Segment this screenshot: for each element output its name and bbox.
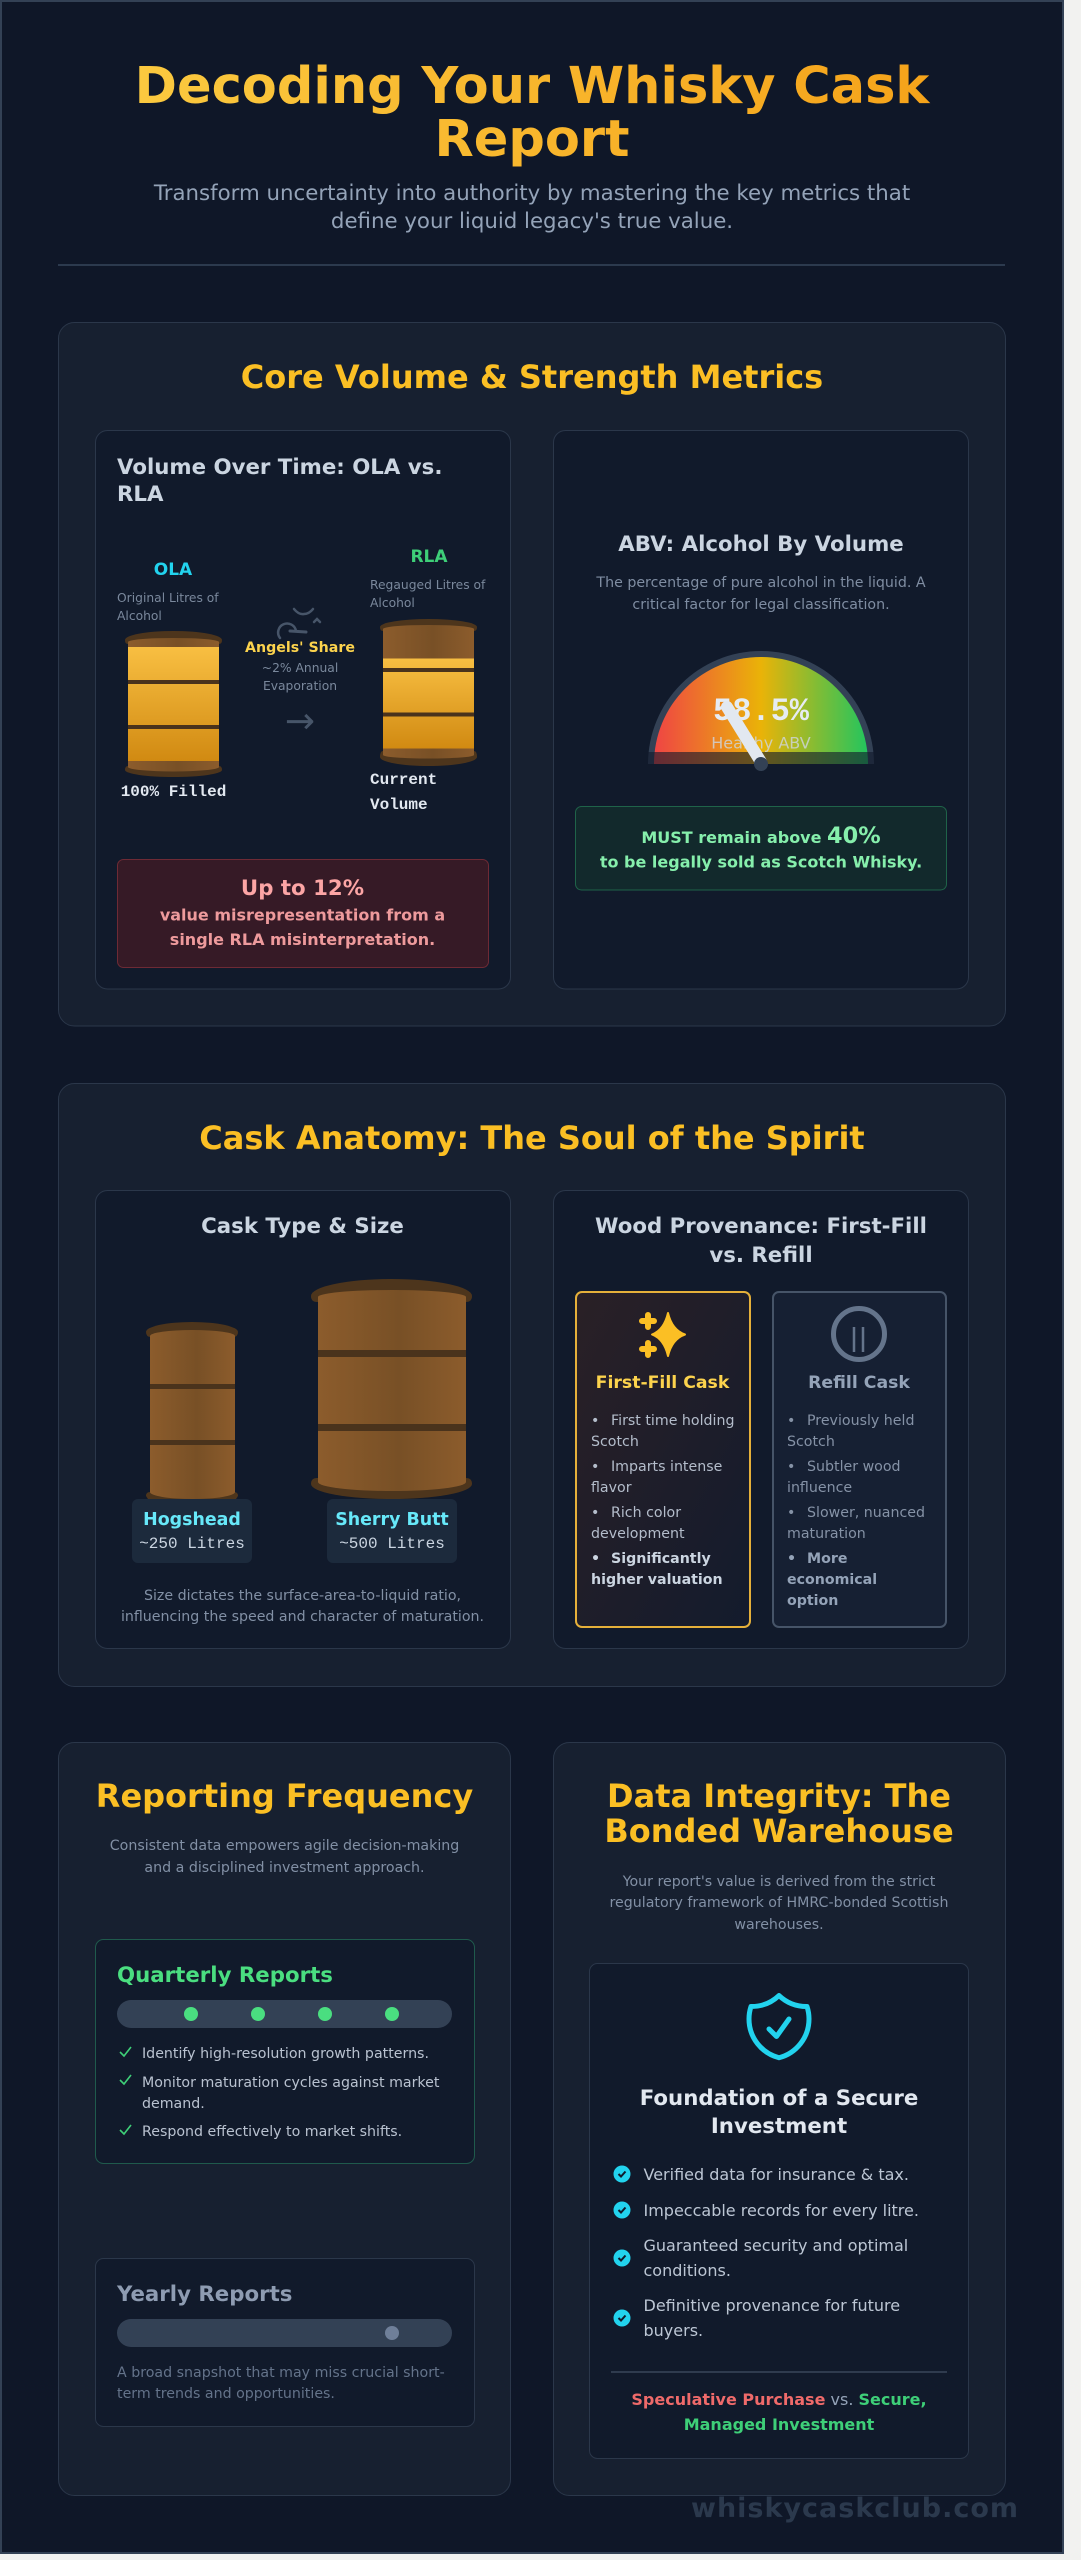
RLA column — [370, 547, 486, 814]
heading: wood provenance: vs. Refill — [709, 1243, 813, 1268]
refill list: maturation — [787, 1526, 866, 1542]
icon: shield check — [746, 1993, 812, 2060]
first-fill list: Imparts intense — [611, 1459, 722, 1475]
first-fill list: • — [591, 1505, 599, 1521]
icon: sherry butt barrel — [311, 1279, 472, 1499]
OLA column — [117, 560, 226, 801]
checklist: Impeccable records for every litre. — [644, 2201, 919, 2220]
first-fill list: Significantly — [611, 1551, 711, 1567]
subtitle: define your liquid legacy's true value. — [331, 209, 733, 234]
refill list: • — [787, 1551, 796, 1567]
angels' share — [245, 609, 355, 742]
title: Decoding Your Whisky Cask — [135, 57, 929, 116]
callout: 40% legal minimum — [576, 806, 946, 890]
heading: volume over time: RLA — [117, 482, 164, 507]
caption: cask size: Size dictates the surface-area-to-liquid ratio, — [144, 1588, 461, 1604]
heading: data integrity: Bonded Warehouse — [604, 1812, 954, 1850]
first-fill list: • — [591, 1413, 599, 1429]
comparison statement: Managed Investment — [684, 2415, 875, 2434]
panel: cask type and size — [96, 1190, 510, 1648]
card: foundation of a secure investment — [590, 1964, 968, 2458]
RLA column: RLA — [410, 547, 448, 567]
quarterly benefits list: Monitor maturation cycles against market — [142, 2075, 439, 2091]
callout: 12% misrepresentation: single RLA misinterpretation. — [170, 930, 435, 949]
card: first-fill cask — [576, 1292, 750, 1627]
data integrity intro text: regulatory framework of HMRC-bonded Scottish — [610, 1895, 948, 1911]
refill list: option — [787, 1593, 838, 1609]
card: yearly reports: Yearly Reports — [116, 2282, 292, 2307]
refill list — [787, 1413, 925, 1609]
first-fill list: • — [591, 1459, 599, 1475]
chart: ABV gauge: 58.5% — [713, 693, 810, 730]
RLA column: Alcohol — [370, 596, 415, 610]
first-fill list: • — [591, 1551, 600, 1567]
first-fill list: flavor — [591, 1480, 632, 1496]
panel: core volume and strength metrics — [58, 322, 1006, 1026]
angels' share: Evaporation — [263, 679, 337, 693]
RLA column: Regauged Litres of — [370, 578, 485, 592]
checklist: Definitive provenance for future — [644, 2296, 900, 2315]
refill list: • — [787, 1505, 795, 1521]
checklist: Verified data for insurance & tax. — [644, 2165, 909, 2184]
refill list: Slower, nuanced — [807, 1505, 925, 1521]
data integrity intro text: warehouses. — [734, 1917, 824, 1933]
heading: foundation: Investment — [711, 2114, 847, 2139]
heading: cask type: Cask Type & Size — [201, 1214, 404, 1239]
panel: wood provenance — [554, 1190, 968, 1648]
quarterly benefits list — [120, 2046, 440, 2140]
OLA column: 100% Filled — [121, 783, 226, 801]
icon: hogshead barrel — [146, 1322, 238, 1499]
card: first-fill cask: First-Fill Cask — [596, 1373, 730, 1393]
refill list: • — [787, 1459, 795, 1475]
label: hogshead: ~250 Litres — [139, 1535, 245, 1553]
card: quarterly reports: Quarterly Reports — [117, 1963, 333, 1988]
heading: foundation: Foundation of a Secure — [640, 2086, 918, 2111]
quarterly benefits list: demand. — [142, 2096, 205, 2112]
OLA column: Alcohol — [117, 609, 162, 623]
ABV description: critical factor for legal classification. — [632, 597, 890, 613]
label: hogshead: Hogshead — [143, 1510, 241, 1530]
panel: volume over time — [96, 430, 510, 989]
first-fill list: development — [591, 1526, 685, 1542]
RLA column: Current — [370, 771, 437, 789]
first-fill list: Scotch — [591, 1434, 639, 1450]
subtitle: Transform uncertainty into authority by mastering the key metrics that — [154, 181, 910, 206]
timeline: four quarterly dots — [117, 2000, 452, 2028]
refill list: Scotch — [787, 1434, 835, 1450]
label: sherry butt: ~500 Litres — [339, 1535, 445, 1553]
first-fill list: Rich color — [611, 1505, 681, 1521]
first-fill list: First time holding — [611, 1413, 734, 1429]
icon: refill circle — [834, 1308, 884, 1360]
refill list: • — [787, 1413, 795, 1429]
heading: volume over time: Volume Over Time: OLA vs. — [117, 455, 442, 480]
heading: data integrity: Data Integrity: The — [607, 1777, 951, 1815]
heading: ABV: ABV: Alcohol By Volume — [618, 532, 904, 557]
angels' share: ~2% Annual — [262, 661, 338, 675]
refill list: More — [807, 1551, 847, 1567]
card: refill cask — [773, 1292, 946, 1627]
refill list: influence — [787, 1480, 852, 1496]
heading: core metrics: Core Volume & Strength Metrics — [241, 358, 823, 396]
card: yearly reports — [96, 2258, 474, 2426]
callout: 12% misrepresentation: value misrepresentation from a — [160, 906, 445, 924]
checklist: Guaranteed security and optimal — [644, 2236, 908, 2255]
label: sherry butt: Sherry Butt — [335, 1510, 449, 1530]
icon: full barrel — [125, 631, 222, 777]
watermark: whiskycaskclub.com — [691, 2493, 1019, 2524]
label: sherry butt — [327, 1499, 457, 1563]
reporting intro text: Consistent data empowers agile decision-making — [110, 1838, 459, 1854]
reporting intro text: and a disciplined investment approach. — [144, 1860, 425, 1876]
yearly note: term trends and opportunities. — [117, 2386, 335, 2402]
quarterly benefits list: Respond effectively to market shifts. — [142, 2124, 402, 2140]
heading: wood provenance: Wood Provenance: First-Fill — [595, 1214, 927, 1239]
icon: partly filled barrel — [380, 619, 477, 766]
checklist — [614, 2165, 919, 2340]
title: Report — [435, 110, 629, 169]
card: quarterly reports — [96, 1940, 474, 2164]
callout: 40% legal minimum: to be legally sold as Scotch Whisky. — [600, 852, 922, 872]
arrow: → — [285, 701, 315, 742]
panel: cask anatomy — [58, 1084, 1006, 1686]
yearly note: A broad snapshot that may miss crucial short- — [117, 2365, 445, 2381]
comparison statement: Speculative Purchase vs. Secure, — [631, 2390, 927, 2409]
RLA column: Volume — [370, 796, 428, 814]
data integrity intro text: Your report's value is derived from the strict — [623, 1874, 935, 1890]
refill list: economical — [787, 1572, 877, 1588]
heading: reporting frequency: Reporting Frequency — [96, 1777, 473, 1815]
panel: reporting frequency — [58, 1742, 510, 2496]
refill list: Subtler wood — [807, 1459, 901, 1475]
header — [135, 57, 930, 234]
icon: evaporation wisps — [278, 609, 320, 638]
quarterly benefits list: Identify high-resolution growth patterns. — [142, 2046, 429, 2062]
icon: sparkles — [642, 1313, 685, 1356]
card: refill cask: Refill Cask — [808, 1373, 910, 1393]
checklist: buyers. — [644, 2321, 703, 2340]
heading: cask anatomy: Cask Anatomy: The Soul of the Spirit — [199, 1119, 865, 1157]
callout: 40% legal minimum: MUST remain above 40% — [641, 823, 881, 849]
caption: cask size: influencing the speed and character of maturation. — [121, 1609, 484, 1625]
chart: ABV gauge: Healthy ABV — [711, 734, 811, 752]
OLA column: Original Litres of — [117, 591, 219, 605]
timeline: one yearly dot — [117, 2319, 452, 2347]
refill list: Previously held — [807, 1413, 914, 1429]
panel: ABV — [554, 430, 968, 989]
ABV description: The percentage of pure alcohol in the liquid. A — [596, 575, 926, 591]
callout: 12% misrepresentation — [118, 860, 488, 968]
label: hogshead — [132, 1499, 252, 1563]
chart: ABV gauge — [648, 651, 874, 771]
callout: 12% misrepresentation: Up to 12% — [241, 876, 364, 901]
OLA column: OLA — [154, 560, 193, 580]
panel: data integrity — [554, 1742, 1006, 2496]
first-fill list: higher valuation — [591, 1572, 723, 1588]
angels' share: Angels' Share — [245, 640, 355, 656]
checklist: conditions. — [644, 2261, 731, 2280]
first-fill list — [591, 1413, 734, 1588]
